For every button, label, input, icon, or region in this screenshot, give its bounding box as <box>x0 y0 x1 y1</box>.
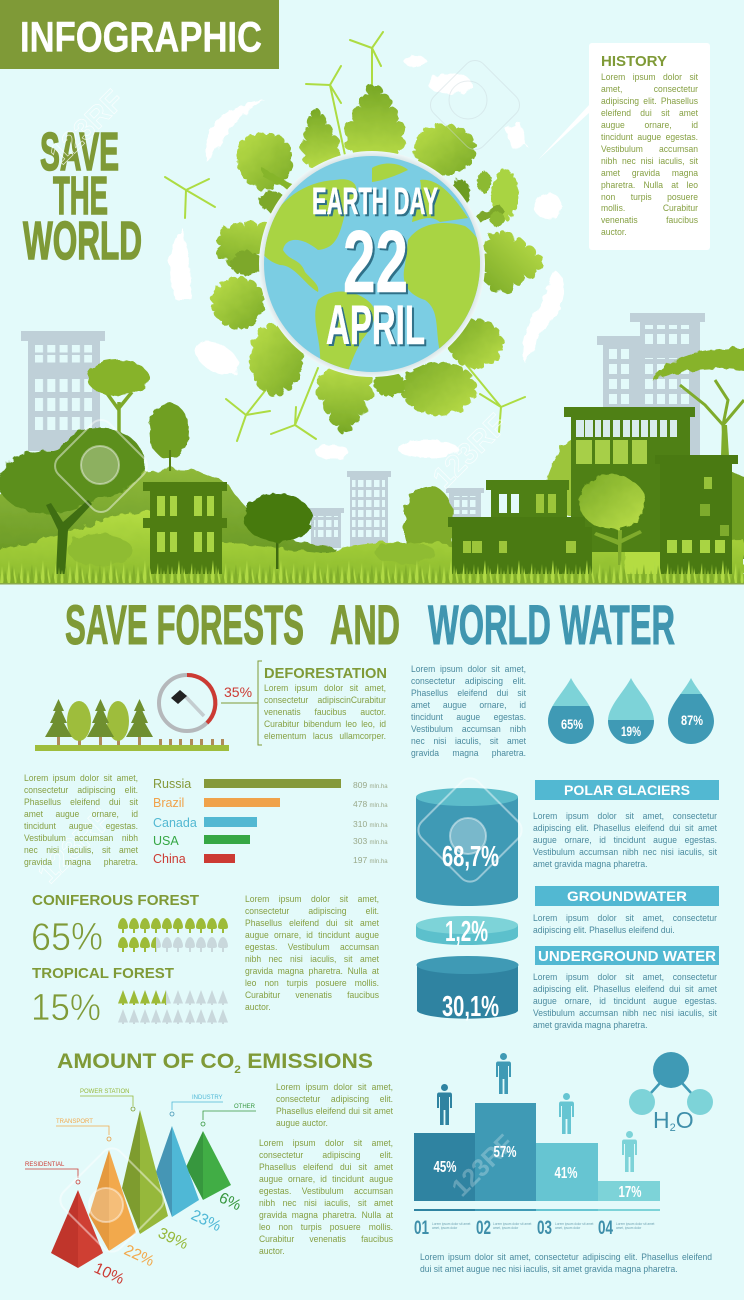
text: forest types: Phasellus eleifend dui sit amet <box>245 918 379 929</box>
coniferous forest stat: CONIFEROUS FOREST <box>32 892 199 909</box>
text: polar glaciers: Vestibulum accumsan nibh nec nisi iaculis, sit <box>533 847 717 858</box>
text: water intro: Vestibulum accumsan nibh <box>411 724 526 735</box>
text: co2 long: Phasellus eleifend dui sit amet <box>259 1162 393 1173</box>
grey city buildings <box>21 313 705 548</box>
water drops <box>548 678 714 744</box>
bar chart: forest by country: China <box>153 852 186 866</box>
text: water intro <box>411 664 526 759</box>
globe: earth day 22 april <box>258 151 490 380</box>
text: water intro: Lorem ipsum dolor sit amet, <box>411 664 526 675</box>
text: co2 long: auctor. <box>259 1246 285 1257</box>
text: forest intro: consectetur adipiscing elit. <box>24 785 138 796</box>
h2o molecule: H <box>653 1107 670 1133</box>
co2 heading: 2 <box>234 1064 241 1076</box>
text: forest types: leo non turpis posuere mollis. <box>245 978 379 989</box>
text: underground water: augue ornare, id tincidunt augue egestas. <box>533 996 717 1007</box>
stock watermarks: 123RF <box>32 803 119 890</box>
stock watermarks: 123RF <box>446 1129 519 1202</box>
pyramid chart: POWER STATION <box>80 1089 129 1095</box>
water drops: 19% <box>621 723 641 739</box>
pyramid chart: OTHER <box>234 1104 256 1110</box>
text: groundwater <box>533 913 717 936</box>
text: water intro: consectetur adipiscing elit. <box>411 676 526 687</box>
podium chart with people: 03 <box>537 1218 552 1239</box>
text: history: auctor. <box>601 227 627 238</box>
text: groundwater: Lorem ipsum dolor sit amet, consectetur <box>533 913 717 924</box>
tropical forest stat <box>31 965 228 1029</box>
text: underground water: adipiscing elit. Phasellus eleifend dui sit amet <box>533 984 717 995</box>
text: history: adipiscing elit. Phasellus <box>601 96 698 107</box>
text: forest intro: nec nisi iaculis, sit amet <box>24 845 138 856</box>
text: water intro: Phasellus eleifend dui sit <box>411 688 526 699</box>
water cylinders: 30,1% <box>442 991 499 1023</box>
text: underground water: amet gravida magna pharetra. <box>533 1020 648 1031</box>
history pointer <box>538 104 590 160</box>
podium chart with people: Lorem ipsum dolor sit amet <box>555 1222 594 1226</box>
text: forest intro <box>24 773 138 868</box>
bar chart: forest by country: Canada <box>153 816 197 830</box>
text: polar glaciers <box>533 811 717 870</box>
podium chart with people: 57% <box>494 1144 516 1161</box>
text: water intro: gravida magna pharetra. <box>411 748 526 759</box>
pyramid chart: 39% <box>155 1225 191 1253</box>
tropical forest stat: 15% <box>31 987 101 1029</box>
text: co2 short: augue auctor. <box>276 1118 328 1129</box>
pyramid chart: TRANSPORT <box>56 1119 93 1125</box>
text: co2 short: consectetur adipiscing elit. <box>276 1094 393 1105</box>
background hills <box>0 438 744 580</box>
podium chart with people: 02 <box>476 1218 491 1239</box>
water cylinders <box>416 788 518 1023</box>
text: forest types: gravida magna pharetra. Nulla at <box>245 966 379 977</box>
text: forest types: nibh nec nisi iaculis, sit amet <box>245 954 379 965</box>
text: water intro: nec nisi iaculis, sit amet <box>411 736 526 747</box>
text: co2 long: Lorem ipsum dolor sit amet, <box>259 1138 393 1149</box>
text: underground water: Vestibulum accumsan nibh nec nisi iaculis, sit <box>533 1008 717 1019</box>
deforestation heading: DEFORESTATION <box>264 665 387 682</box>
text: deforestation: Curabitur bibendum leo leo, id <box>264 719 386 730</box>
text: forest types: augue ornare, id tincidunt augue <box>245 930 379 941</box>
text: forest types <box>245 894 379 1013</box>
text: history: amet gravida magna <box>601 168 698 179</box>
text: forest intro: Phasellus eleifend dui sit <box>24 797 138 808</box>
section title: AND <box>330 593 400 656</box>
text: podium caption <box>420 1252 712 1275</box>
text: forest intro: gravida magna pharetra. <box>24 857 138 868</box>
stock watermarks: 123RF <box>427 408 514 495</box>
text: history: mollis. Curabitur <box>601 203 698 214</box>
deforestation gauge with axe: 35% <box>224 684 252 700</box>
text: deforestation: venenatis faucibus auctor. <box>264 707 386 718</box>
text: co2 long <box>259 1138 393 1257</box>
dark round tree <box>244 494 312 569</box>
text: forest types: consectetur adipiscing elit. <box>245 906 379 917</box>
h2o molecule <box>629 1052 713 1134</box>
podium chart with people: Lorem ipsum dolor sit amet <box>493 1222 532 1226</box>
light foreground hills <box>0 510 744 580</box>
text: co2 long: nibh nec nisi iaculis, sit amet <box>259 1198 393 1209</box>
water cylinders: 68,7% <box>442 841 499 873</box>
pyramid chart: RESIDENTIAL <box>25 1162 65 1168</box>
heading: save the world: WORLD <box>23 211 142 271</box>
green building left <box>143 482 227 576</box>
h2o molecule: O <box>676 1107 694 1133</box>
coniferous forest stat <box>31 892 228 959</box>
globe: earth day 22 april: EARTH DAY <box>312 181 438 223</box>
text: forest intro: tincidunt augue egestas. <box>24 821 138 832</box>
pyramid chart: 22% <box>121 1242 157 1270</box>
water section headers: GROUNDWATER <box>567 888 687 904</box>
water cylinders: 1,2% <box>445 916 488 948</box>
clouds <box>170 55 564 459</box>
text: history: pharetra. Nulla at leo <box>601 180 698 191</box>
text: forest intro: amet augue ornare, id <box>24 809 138 820</box>
bar chart: forest by country: 197 mln.ha <box>353 855 388 865</box>
text: polar glaciers: amet gravida magna pharetra. <box>533 859 648 870</box>
text: co2 long: gravida magna pharetra. Nulla at <box>259 1210 393 1221</box>
text: groundwater: adipiscing elit. Phasellus eleifend dui. <box>533 925 675 936</box>
green buildings right <box>448 407 738 575</box>
tropical forest stat: TROPICAL FOREST <box>32 965 174 982</box>
trees in landscape <box>87 360 189 471</box>
text: underground water: Lorem ipsum dolor sit amet, consectetur <box>533 972 717 983</box>
history heading: HISTORY <box>601 53 667 70</box>
text: co2 long: consectetur adipiscing elit. <box>259 1150 393 1161</box>
text: polar glaciers: adipiscing elit. Phasellus eleifend dui sit amet <box>533 823 717 834</box>
acacia tree <box>652 348 744 456</box>
text: deforestation: consectetur adipiscinCurabitur <box>264 695 386 706</box>
podium chart with people: 17% <box>618 1184 642 1201</box>
bar chart: forest by country: 478 mln.ha <box>353 799 388 809</box>
podium chart with people: Lorem ipsum dolor sit amet <box>616 1222 655 1226</box>
forest line illustration <box>35 699 229 751</box>
text: co2 long: Curabitur venenatis faucibus <box>259 1234 393 1245</box>
coniferous forest stat: 65% <box>31 916 103 959</box>
stock watermarks: 123RF <box>44 84 131 171</box>
globe: earth day 22 april: APRIL <box>326 293 425 356</box>
text: history: amet, consectetur <box>601 84 698 95</box>
podium chart with people: amet, ipsum dolor <box>432 1226 458 1230</box>
text: co2 long: augue ornare, id tincidunt augue <box>259 1174 393 1185</box>
water section headers: UNDERGROUND WATER <box>538 948 716 965</box>
heading: save the world: THE <box>53 166 108 226</box>
text: history: nibh nec nisi iaculis, sit <box>601 156 698 167</box>
text: water intro: amet augue ornare, id <box>411 700 526 711</box>
front tree right <box>579 475 645 565</box>
text: polar glaciers: Lorem ipsum dolor sit amet, consectetur <box>533 811 717 822</box>
h2o molecule: 2 <box>670 1122 676 1134</box>
deforestation gauge with axe <box>159 661 262 745</box>
text: history: eleifend dui sit amet <box>601 108 698 119</box>
globe: earth day 22 april: 22 <box>343 212 408 311</box>
text: co2 short <box>276 1082 393 1129</box>
podium chart with people: amet, ipsum dolor <box>493 1226 519 1230</box>
podium chart with people: Lorem ipsum dolor sit amet <box>432 1222 471 1226</box>
podium chart with people: amet, ipsum dolor <box>555 1226 581 1230</box>
bar chart: forest by country: 809 mln.ha <box>353 780 388 790</box>
bar chart: forest by country: Russia <box>153 777 191 791</box>
podium chart with people: amet, ipsum dolor <box>616 1226 642 1230</box>
trees around globe <box>207 86 543 433</box>
text: forest intro: Lorem ipsum dolor sit amet, <box>24 773 138 784</box>
bar chart: forest by country: 303 mln.ha <box>353 836 388 846</box>
text: deforestation <box>264 683 386 742</box>
bar chart: forest by country <box>153 777 388 866</box>
text: forest types: auctor. <box>245 1002 271 1013</box>
title banner <box>0 0 279 69</box>
pyramid chart: INDUSTRY <box>192 1095 223 1101</box>
bar chart: forest by country: 310 mln.ha <box>353 819 388 829</box>
co2 heading: EMISSIONS <box>241 1050 373 1073</box>
text: history: venenatis faucibus <box>601 215 698 226</box>
text: forest intro: Vestibulum accumsan nibh <box>24 833 138 844</box>
text: deforestation: elementum lacus ullamcorper. <box>264 731 386 742</box>
water section headers: POLAR GLACIERS <box>564 782 690 798</box>
pyramid chart: 10% <box>91 1260 127 1288</box>
history panel background <box>589 43 710 250</box>
pyramid chart: 23% <box>188 1207 224 1235</box>
text: podium caption: Lorem ipsum dolor sit amet, consectetur adipiscing elit. Phasellus eleifend <box>420 1252 712 1263</box>
text: history: non turpis posuere <box>601 192 698 203</box>
heading: save the world: SAVE <box>40 122 119 182</box>
text: polar glaciers: augue ornare, id tincidunt augue egestas. <box>533 835 717 846</box>
large left tree <box>0 428 144 575</box>
text: podium caption: dui sit amet augue nec nisi iaculis, sit amet gravida magna pharetra. <box>420 1264 678 1275</box>
text: history <box>601 72 698 238</box>
pyramid chart <box>25 1089 256 1288</box>
water drops: 87% <box>681 712 703 728</box>
grass strip <box>0 556 744 584</box>
text: co2 short: Phasellus eleifend dui sit amet <box>276 1106 393 1117</box>
podium chart with people <box>414 1053 660 1239</box>
text: underground water <box>533 972 717 1031</box>
podium chart with people: 45% <box>434 1159 456 1176</box>
heading: save the world <box>23 122 142 271</box>
podium chart with people: 04 <box>598 1218 613 1239</box>
water drops: 65% <box>561 716 583 732</box>
text: history: augue ornare, id <box>601 120 698 131</box>
water section headers <box>535 780 719 965</box>
text: deforestation: Lorem ipsum dolor sit amet, <box>264 683 386 694</box>
text: co2 long: egestas. Vestibulum accumsan <box>259 1186 393 1197</box>
podium chart with people: 01 <box>414 1218 429 1239</box>
co2 heading: AMOUNT OF CO <box>57 1050 221 1073</box>
text: forest types: Lorem ipsum dolor sit amet, <box>245 894 379 905</box>
stock watermarks <box>32 56 527 1257</box>
title banner: INFOGRAPHIC <box>20 14 262 62</box>
pyramid chart: 6% <box>216 1189 244 1214</box>
wind turbines <box>165 32 525 441</box>
text: history: tincidunt augue egestas. <box>601 132 698 143</box>
text: water intro: tincidunt augue egestas. <box>411 712 526 723</box>
text: history: Vestibulum accumsan <box>601 144 698 155</box>
section title: SAVE FORESTS <box>65 593 304 656</box>
text: co2 long: leo non turpis posuere mollis. <box>259 1222 393 1233</box>
text: co2 short: Lorem ipsum dolor sit amet, <box>276 1082 393 1093</box>
text: history: Lorem ipsum dolor sit <box>601 72 698 83</box>
podium chart with people: 41% <box>554 1165 578 1182</box>
text: forest types: Curabitur venenatis faucibus <box>245 990 379 1001</box>
text: forest types: egestas. Vestibulum accumsan <box>245 942 379 953</box>
bar chart: forest by country: Brazil <box>153 796 184 810</box>
bar chart: forest by country: USA <box>153 834 179 848</box>
